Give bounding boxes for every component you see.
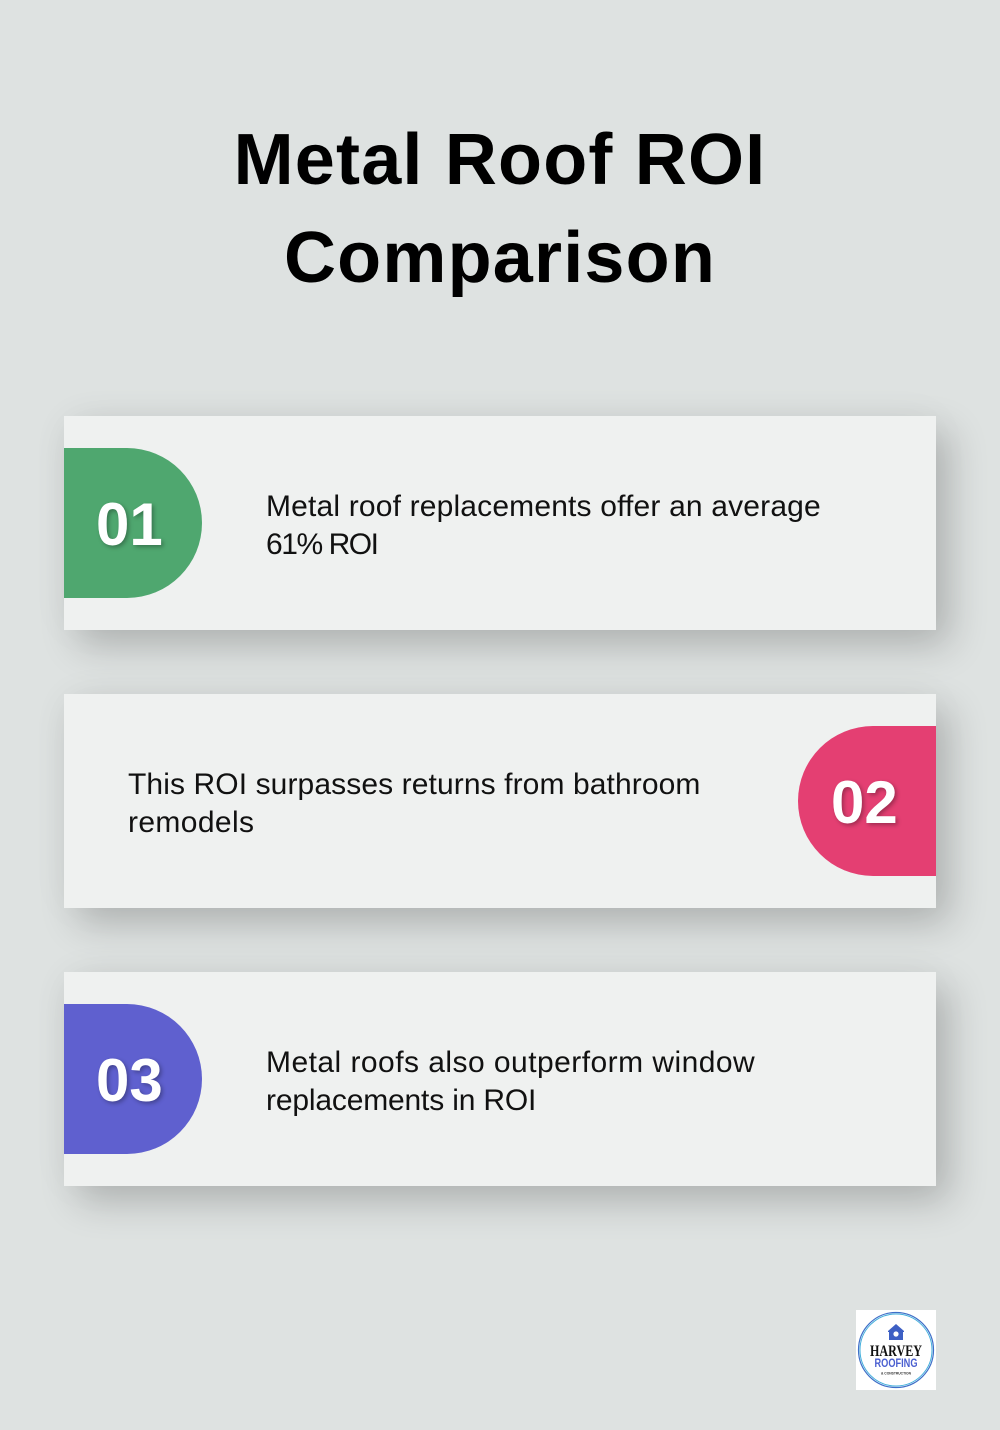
- badge: 02: 02: [831, 769, 898, 836]
- logo: Harvey Roofing: & CONSTRUCTION: [881, 1370, 911, 1376]
- text: step 03: Metal roofs also outperform window: [266, 1046, 755, 1079]
- text: step 01: [266, 490, 821, 561]
- icon: house: [888, 1324, 904, 1340]
- panel: step 02: [64, 694, 936, 908]
- logo: Harvey Roofing: [856, 1310, 936, 1390]
- text: step 02: This ROI surpasses returns from bathroom: [128, 768, 701, 801]
- panel: step 01: [64, 416, 936, 630]
- text: step 03: [266, 1046, 755, 1117]
- title: Comparison: [284, 218, 716, 298]
- logo: Harvey Roofing: ROOFING: [874, 1358, 918, 1370]
- badge: 01: [64, 448, 202, 598]
- text: step 01: 61% ROI: [266, 528, 378, 561]
- badge: 02: [798, 726, 936, 876]
- panel: step 03: [64, 972, 936, 1186]
- title: Metal Roof ROI: [234, 120, 766, 200]
- badge: 03: 03: [96, 1047, 163, 1114]
- badge: 01: 01: [96, 491, 163, 558]
- title: [234, 120, 766, 298]
- text: step 02: [128, 768, 701, 839]
- text: step 01: Metal roof replacements offer an average: [266, 490, 821, 523]
- badge: 03: [64, 1004, 202, 1154]
- text: step 02: remodels: [128, 806, 254, 839]
- text: step 03: replacements in ROI: [266, 1084, 536, 1117]
